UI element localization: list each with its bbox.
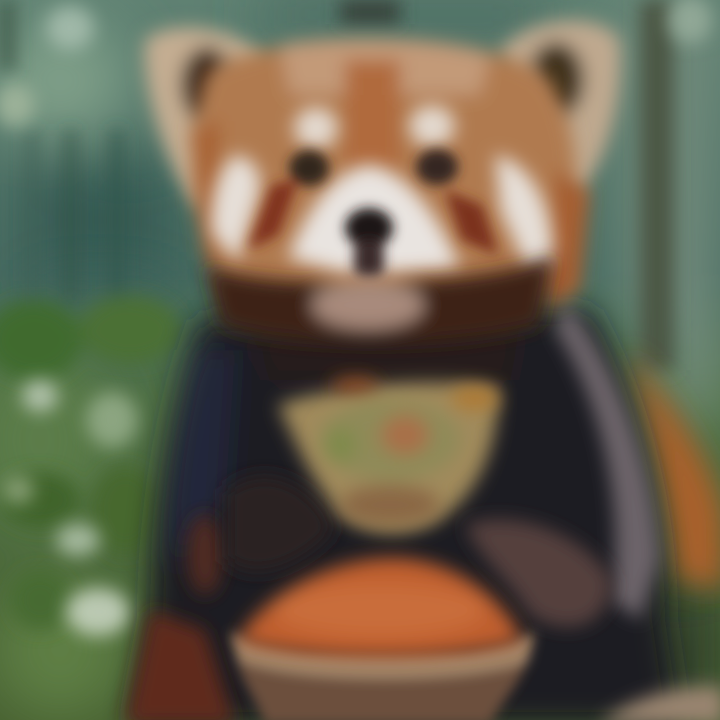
bowl rim and base: [230, 632, 535, 720]
eyes and red cheeks: [248, 149, 498, 255]
rock bottom right: [600, 686, 720, 720]
lower food bowl: [230, 558, 535, 720]
lower left reddish fur: [125, 515, 235, 720]
face base: [190, 38, 590, 310]
head: [144, 20, 621, 344]
ears: [144, 20, 621, 210]
paws: [225, 476, 612, 627]
body: dark fur: [130, 310, 680, 720]
chin: [205, 255, 555, 344]
white face patches: [211, 105, 552, 275]
upper food bowl: [278, 377, 499, 533]
orange flank: [625, 350, 720, 590]
nose and mouth: [345, 208, 393, 278]
orange food mound: [238, 558, 522, 656]
grey fur band: [555, 300, 660, 620]
